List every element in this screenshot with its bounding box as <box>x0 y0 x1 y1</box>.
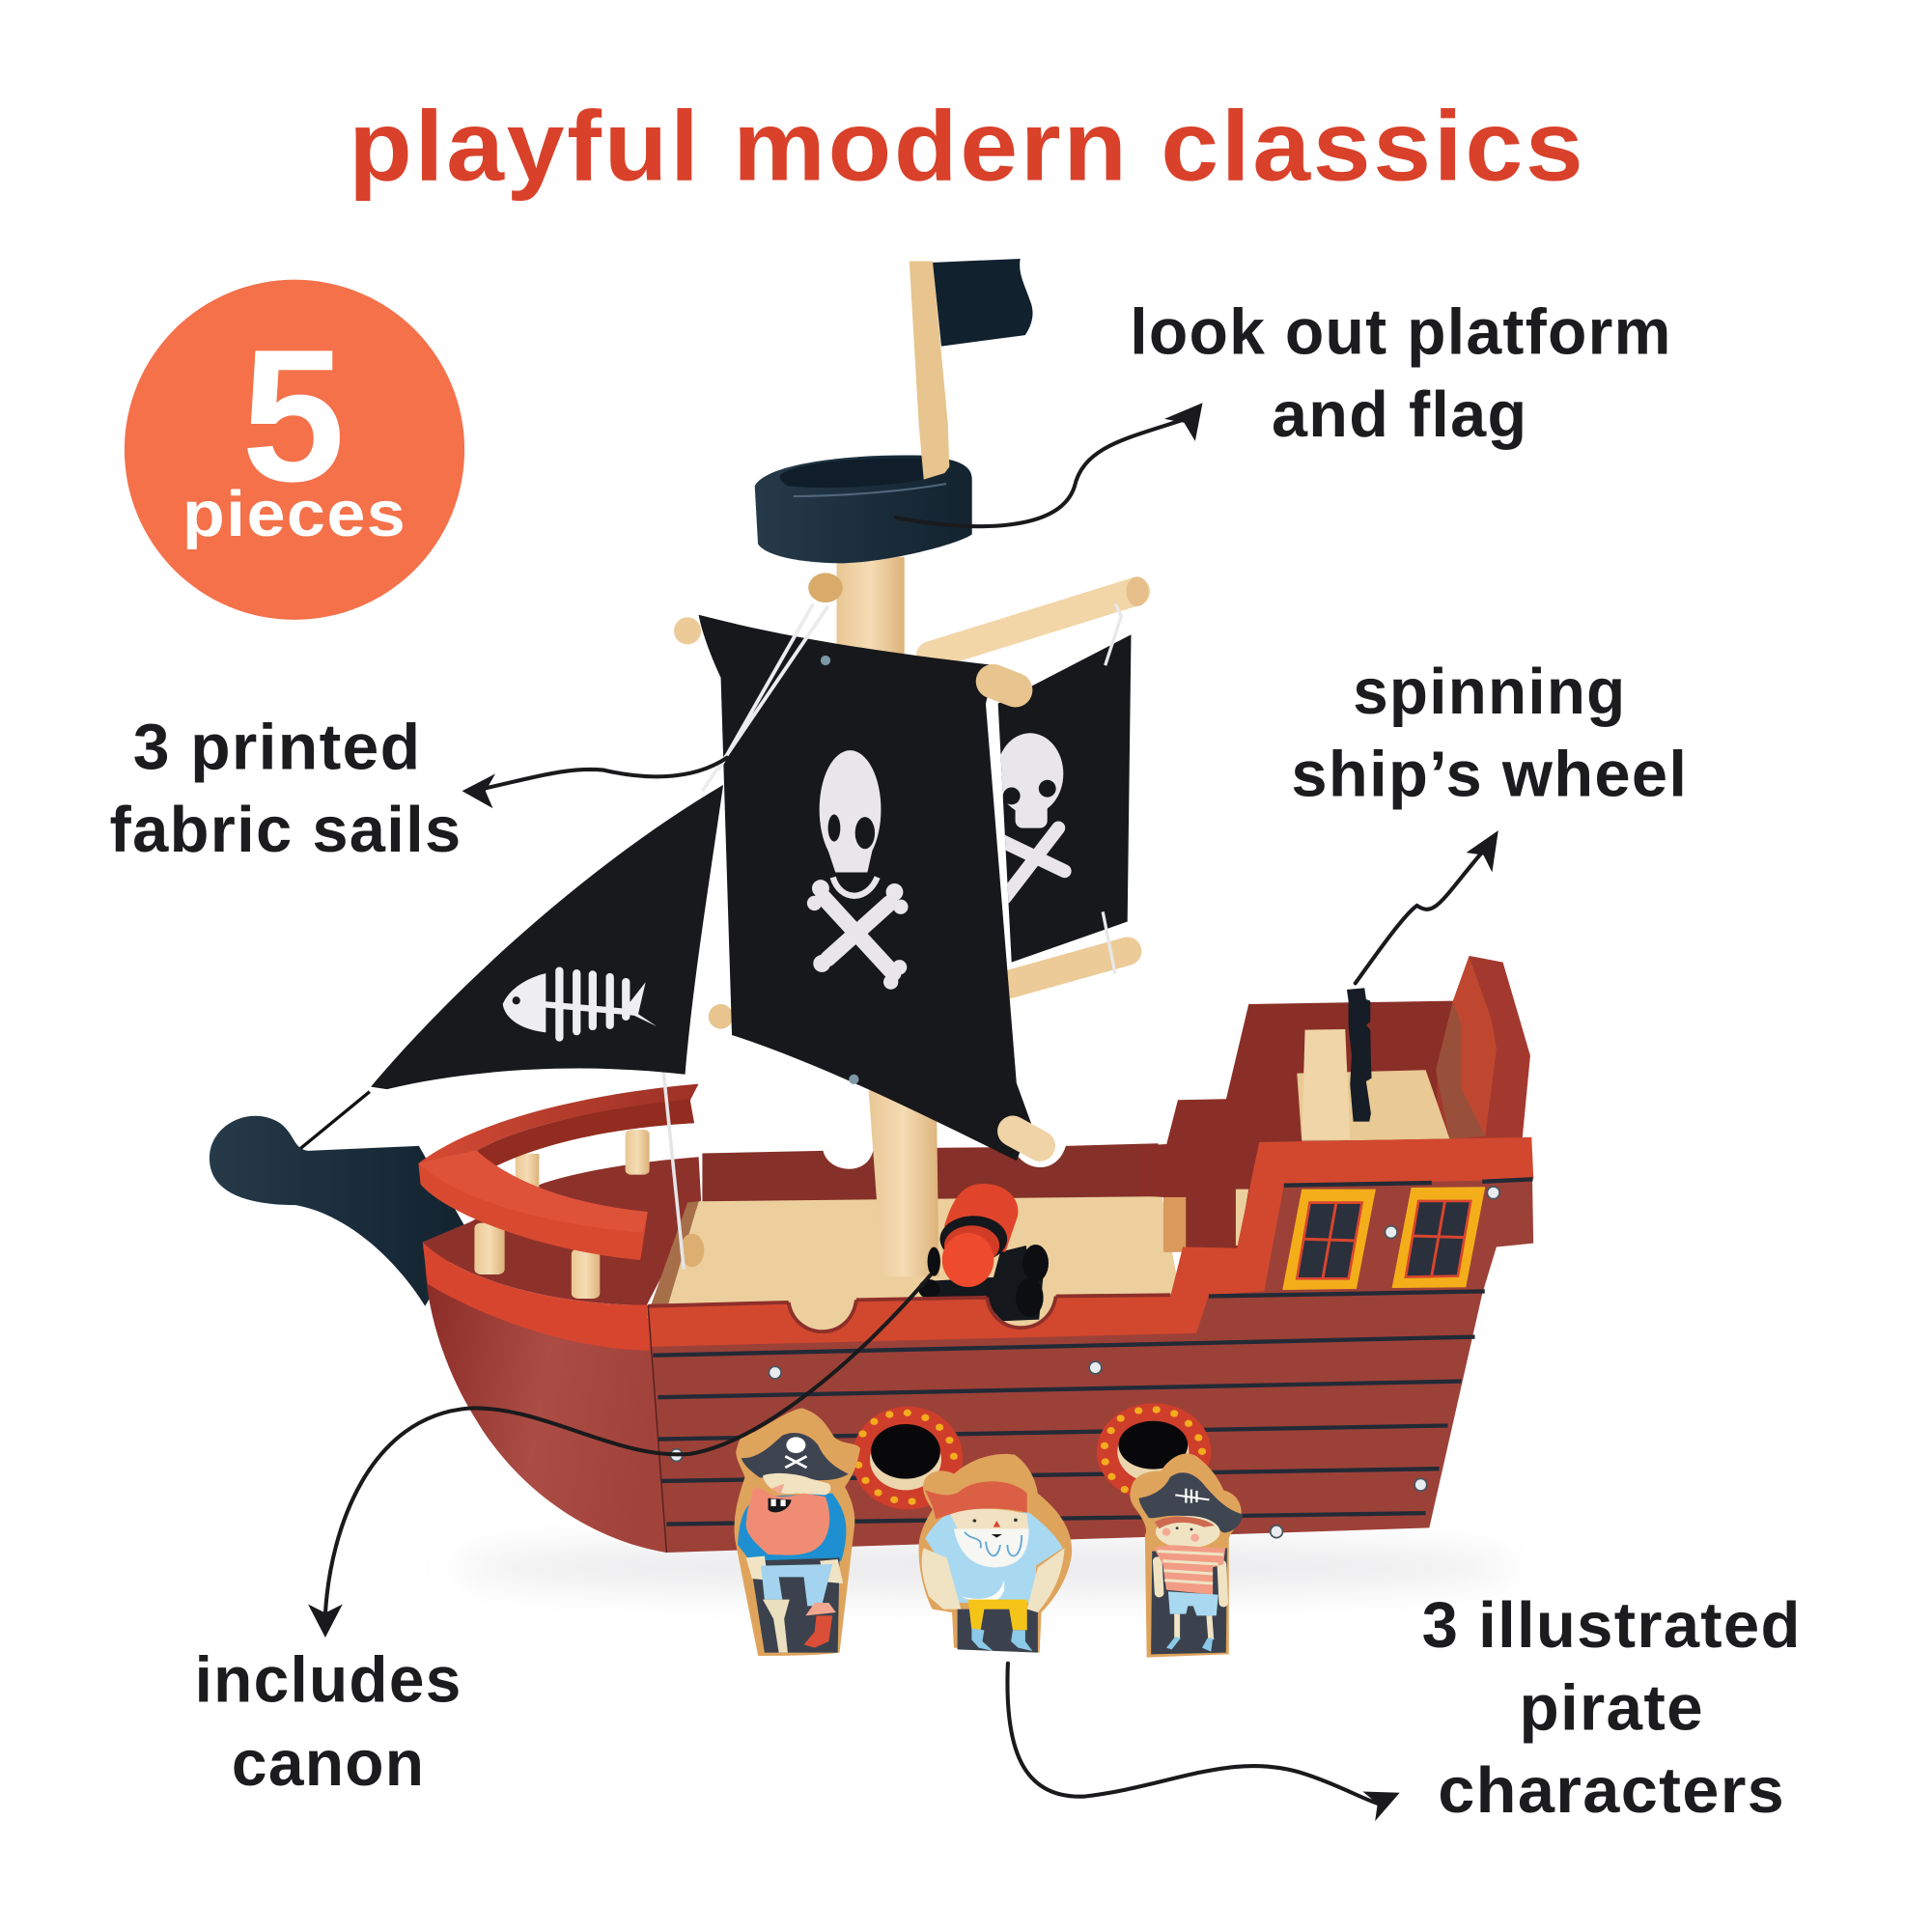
label: includes canon: canon <box>232 1728 425 1800</box>
pirate figure: bearded sailor <box>919 1454 1072 1653</box>
pirate figure: boy <box>1130 1453 1243 1658</box>
flag pole <box>910 262 948 427</box>
white rigging ropes <box>702 603 828 791</box>
deck blocks <box>1163 1197 1186 1252</box>
yard ends <box>674 617 733 1029</box>
carriage <box>927 1274 1044 1321</box>
bow seam <box>648 1306 666 1553</box>
pirate ship toy <box>210 259 1533 1553</box>
label: ship's wheel: spinning <box>1353 657 1627 728</box>
label: ship's wheel: ship’s wheel <box>1291 739 1688 810</box>
label: look out platform: look out platform <box>1130 296 1672 368</box>
figurehead prow <box>210 1116 468 1306</box>
flag <box>933 259 1033 347</box>
bow band <box>423 1242 650 1351</box>
label: pirate characters: characters <box>1438 1755 1785 1827</box>
label: includes canon <box>195 1644 462 1800</box>
mast lower <box>869 1090 938 1276</box>
label: includes canon: includes <box>195 1644 462 1716</box>
bow top surface <box>423 1157 701 1305</box>
deck edge strip <box>651 1201 699 1306</box>
rope peg <box>680 1234 704 1267</box>
bow hull <box>425 1257 666 1553</box>
label: fabric sails: fabric sails <box>110 795 462 866</box>
badge: 5 pieces: pieces <box>182 479 406 550</box>
deck notch floor and main deck <box>668 1196 1181 1346</box>
forestay rope <box>300 1092 370 1148</box>
hull back wall <box>702 1143 1159 1232</box>
mast peg <box>808 573 843 602</box>
label: ship's wheel <box>1291 657 1688 810</box>
bottom yard end <box>1013 1132 1040 1146</box>
skull print <box>807 750 909 990</box>
arrow: to sails <box>462 758 727 808</box>
label: pirate characters: 3 illustrated <box>1422 1590 1802 1662</box>
triangular sail <box>371 785 723 1089</box>
sail rope <box>661 1053 684 1269</box>
cabin windows <box>1282 1187 1485 1290</box>
label: pirate characters <box>1422 1590 1802 1827</box>
arrow: to platform <box>896 403 1203 526</box>
arrow: to characters <box>1007 1664 1400 1821</box>
red top strip and cabin face <box>647 1137 1533 1347</box>
fish skeleton print <box>503 971 657 1038</box>
label: fabric sails: 3 printed <box>133 712 421 783</box>
floor shadow <box>456 1540 1516 1594</box>
mast upper <box>837 557 905 668</box>
railing front arm <box>418 1151 648 1260</box>
back posts <box>516 1154 539 1190</box>
stern post <box>1437 956 1530 1139</box>
label: look out platform <box>1130 296 1672 451</box>
label: pirate characters: pirate <box>1519 1673 1704 1745</box>
label: fabric sails <box>110 712 462 866</box>
arrow: to wheel <box>1356 830 1498 983</box>
main square sail <box>699 615 1031 1161</box>
ship's wheel <box>1347 988 1372 1122</box>
hull side panel <box>647 1137 1533 1553</box>
look out platform <box>755 425 972 563</box>
notch rims <box>648 1295 1170 1331</box>
bow railing and posts <box>418 1084 704 1299</box>
front posts <box>474 1223 505 1274</box>
stern inner wall <box>1139 1001 1453 1252</box>
title: playful modern classics <box>349 89 1585 201</box>
badge: 5 pieces: 5 <box>241 311 345 521</box>
wheel stand <box>1302 1029 1350 1139</box>
plank stripes <box>653 1179 1533 1525</box>
railing back arm <box>418 1084 699 1163</box>
portholes <box>852 1403 1211 1509</box>
cannon <box>918 1184 1049 1321</box>
label: look out platform: and flag <box>1272 379 1527 451</box>
badge: 5 pieces <box>125 280 464 620</box>
arrow: to cannon <box>308 1275 930 1638</box>
rear sail assembly <box>930 576 1148 986</box>
stern wall and upper deck <box>1139 956 1530 1252</box>
pirate figure: captain <box>735 1408 860 1656</box>
top yard end <box>994 682 1016 690</box>
upper deck <box>1297 1070 1450 1141</box>
screws <box>670 1187 1499 1538</box>
barrel <box>944 1184 1018 1252</box>
